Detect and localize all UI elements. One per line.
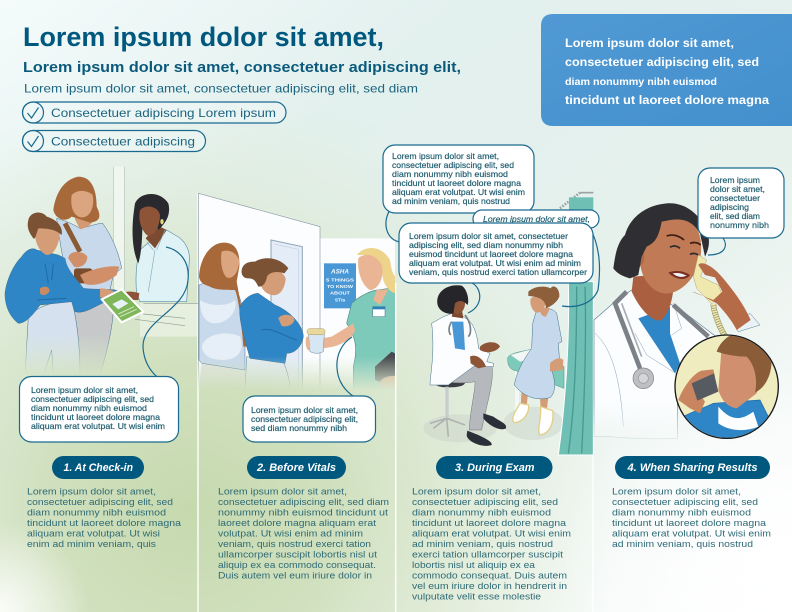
blue callout box: tincidunt ut laoreet dolore magna bbox=[565, 94, 770, 107]
figures fading at the bottom bbox=[5, 177, 189, 375]
callout: provider question bbox=[383, 145, 534, 242]
callout: check-in: aliquam erat volutpat. Ut wisi enim bbox=[31, 421, 165, 431]
step 2 body text: volutpat. Ut wisi enim ad minim bbox=[218, 528, 363, 540]
poster: ABOUT bbox=[330, 291, 350, 297]
step 4 body text: tincidunt ut laoreet dolore magna bbox=[612, 518, 767, 529]
step 3 body text: commodo consequat. Duis autem bbox=[412, 570, 567, 582]
callout: check-in: tincidunt ut laoreet dolore magna bbox=[31, 412, 160, 422]
callout: before vitals: Lorem ipsum dolor sit amet, bbox=[251, 405, 358, 415]
checklist pill 2 bbox=[22, 130, 206, 152]
step 1 body text: diam nonummy nibh euismod bbox=[27, 508, 166, 518]
step 1 body text: tincidunt ut laoreet dolore magna bbox=[27, 518, 182, 529]
callout: before vitals: consectetuer adipiscing elit, bbox=[251, 414, 358, 424]
step 3 body text: ad minim veniam, quis nostrud bbox=[412, 539, 553, 550]
callout: provider explanation: aliquam erat volutpat. Ut wisi enim ad minim bbox=[409, 258, 581, 268]
poster: 5 THINGS bbox=[326, 277, 355, 283]
step 3 body text: vulputate velit esse molestie bbox=[412, 592, 541, 602]
callout: result call: adipiscing bbox=[710, 202, 749, 212]
title: Lorem ipsum dolor sit amet, bbox=[23, 22, 384, 52]
illustration: during exam bbox=[423, 193, 593, 455]
illustration: sharing results bbox=[594, 203, 778, 443]
step 4 body text bbox=[612, 486, 771, 550]
blue callout box bbox=[541, 14, 792, 126]
step 2 label: 2. Before Vitals bbox=[256, 462, 336, 474]
step 3 body text bbox=[412, 486, 571, 602]
illustration: before vitals bbox=[198, 193, 407, 391]
step 3 label: 3. During Exam bbox=[455, 462, 535, 474]
step 1 body text: enim ad minim veniam, quis bbox=[27, 539, 156, 550]
callout: provider question: diam nonummy nibh euismod bbox=[392, 169, 508, 179]
specimen cup bbox=[306, 329, 325, 353]
callout: result call: dolor sit amet, bbox=[710, 184, 765, 194]
icon: check mark 1 bbox=[22, 102, 44, 123]
blue callout box: Lorem ipsum dolor sit amet, bbox=[565, 37, 734, 50]
doctor bbox=[430, 285, 506, 446]
step 3 body text: lobortis nisl ut aliquip ex ea bbox=[412, 560, 536, 571]
step 3 body text: diam nonummy nibh euismod bbox=[412, 508, 551, 518]
callout: provider explanation: euismod tincidunt ut laoreet dolore magna bbox=[409, 249, 573, 259]
poster bbox=[324, 263, 356, 308]
callout: check-in: diam nonummy nibh euismod bbox=[31, 403, 147, 413]
callout: check-in: consectetuer adipiscing elit, sed bbox=[31, 394, 154, 404]
step 2 body text: Lorem ipsum dolor sit amet, bbox=[218, 486, 347, 498]
step 1 body text: aliquam erat volutpat. Ut wisi bbox=[27, 528, 160, 540]
callout: result call: nonummy nibh bbox=[710, 220, 769, 230]
callout: provider explanation: Lorem ipsum dolor sit amet, consectetuer bbox=[409, 231, 568, 241]
callout: provider explanation: veniam, quis nostrud exerci tation ullamcorper bbox=[409, 267, 587, 277]
step 4 body text: aliquam erat volutpat. Ut wisi enim bbox=[612, 528, 771, 540]
callout: result call bbox=[698, 168, 784, 255]
nurse bbox=[324, 248, 395, 388]
curtain bbox=[558, 193, 593, 455]
step 3 body text: exerci tation ullamcorper suscipit bbox=[412, 550, 563, 560]
step 4 body text: ad minim veniam, quis nostrud bbox=[612, 539, 753, 550]
step 2 body text: veniam, quis nostrud exerci tation bbox=[218, 539, 371, 550]
step 2 body text: ullamcorper suscipit lobortis nisl ut bbox=[218, 550, 377, 560]
blue callout box: diam nonummy nibh euismod bbox=[565, 77, 717, 88]
receptionist bbox=[120, 194, 189, 302]
step 2 body text: nonummy nibh euismod tincidunt ut bbox=[218, 508, 388, 518]
step 1 body text bbox=[27, 486, 182, 550]
step 1 label: 1. At Check-in bbox=[64, 462, 133, 474]
step 4 body text: consectetuer adipiscing elit, sed bbox=[612, 497, 758, 508]
callout: provider question: consectetuer adipiscing elit, sed bbox=[392, 160, 514, 170]
step 3 body text: Lorem ipsum dolor sit amet, bbox=[412, 486, 541, 498]
doctor on phone bbox=[594, 203, 760, 439]
step 2 label bbox=[247, 456, 346, 479]
daughter bbox=[5, 213, 118, 375]
panel dividers bbox=[198, 193, 593, 612]
callout: provider question: aliquam erat volutpat. Ut wisi enim bbox=[392, 187, 525, 197]
poster: STIs bbox=[335, 297, 345, 303]
poster: ASHA bbox=[330, 268, 349, 275]
step 1 body text: consectetuer adipiscing elit, sed bbox=[27, 497, 173, 508]
callout: provider explanation bbox=[399, 223, 593, 313]
step 3 body text: consectetuer adipiscing elit, sed bbox=[412, 497, 558, 508]
brochure bbox=[102, 289, 143, 322]
step 2 body text: Duis autem vel eum iriure dolor in bbox=[218, 570, 372, 582]
mother bbox=[53, 177, 122, 375]
exam table bbox=[508, 348, 564, 413]
callout: result call: elit, sed diam bbox=[710, 211, 760, 221]
callout: result call: Lorem ipsum bbox=[710, 175, 760, 185]
subtitle: Lorem ipsum dolor sit amet, consectetuer adipiscing elit, bbox=[23, 59, 461, 76]
step 1 label bbox=[52, 456, 144, 479]
callout: provider question: tincidunt ut laoreet dolore magna bbox=[392, 178, 521, 188]
callout: check-in bbox=[20, 247, 188, 442]
callout: provider question: Lorem ipsum dolor sit amet, bbox=[392, 151, 499, 161]
callout: before vitals bbox=[243, 337, 376, 442]
callout: provider explanation: adipiscing elit, sed diam nonummy nibh bbox=[409, 240, 563, 250]
step 4 body text: diam nonummy nibh euismod bbox=[612, 508, 751, 518]
mother bbox=[199, 243, 248, 390]
header bbox=[23, 22, 461, 96]
step 2 body text: laoreet dolore magna aliquam erat bbox=[218, 518, 376, 529]
step 3 body text: aliquam erat volutpat. Ut wisi enim bbox=[412, 528, 571, 540]
step 1 body text: Lorem ipsum dolor sit amet, bbox=[27, 486, 156, 498]
floor shadows bbox=[423, 407, 563, 442]
checklist pill 1 bbox=[22, 102, 286, 123]
patient bbox=[513, 286, 563, 435]
wall and counter bbox=[113, 167, 198, 337]
icon: check mark 2 bbox=[22, 130, 44, 152]
step 2 body text bbox=[218, 486, 389, 582]
inset circle: patient on cell phone bbox=[675, 330, 778, 443]
step 3 body text: vel eum iriure dolor in hendrerit in bbox=[412, 581, 567, 592]
step 4 label: 4. When Sharing Results bbox=[627, 462, 758, 474]
checklist pill 1: Consectetuer adipiscing Lorem ipsum bbox=[51, 106, 276, 120]
callout: patient reply bbox=[473, 210, 600, 307]
step 4 label bbox=[615, 456, 770, 479]
step 2 body text: consectetuer adipiscing elit, sed diam bbox=[218, 497, 389, 508]
callout: provider question: ad minim veniam, quis nostrud bbox=[392, 196, 510, 206]
illustration: check-in desk bbox=[5, 167, 198, 375]
callout: patient reply: Lorem ipsum dolor sit amet, bbox=[483, 214, 590, 224]
step 3 body text: tincidunt ut laoreet dolore magna bbox=[412, 518, 567, 529]
blue callout box: consectetuer adipiscing elit, sed bbox=[565, 56, 759, 69]
callout: result call: consectetuer bbox=[710, 193, 760, 203]
clinic walls and door bbox=[198, 193, 402, 390]
step 2 body text: aliquip ex ea commodo consequat. bbox=[218, 560, 376, 571]
step 4 body text: Lorem ipsum dolor sit amet, bbox=[612, 486, 741, 498]
callout: check-in: Lorem ipsum dolor sit amet, bbox=[31, 385, 138, 395]
checklist pill 2: Consectetuer adipiscing bbox=[51, 134, 195, 148]
step 3 label bbox=[436, 456, 552, 479]
daughter bbox=[240, 258, 303, 390]
poster: TO KNOW bbox=[327, 284, 353, 290]
callout: before vitals: sed diam nonummy nibh bbox=[251, 423, 347, 433]
intro line: Lorem ipsum dolor sit amet, consectetuer adipiscing elit, sed diam bbox=[24, 82, 418, 96]
